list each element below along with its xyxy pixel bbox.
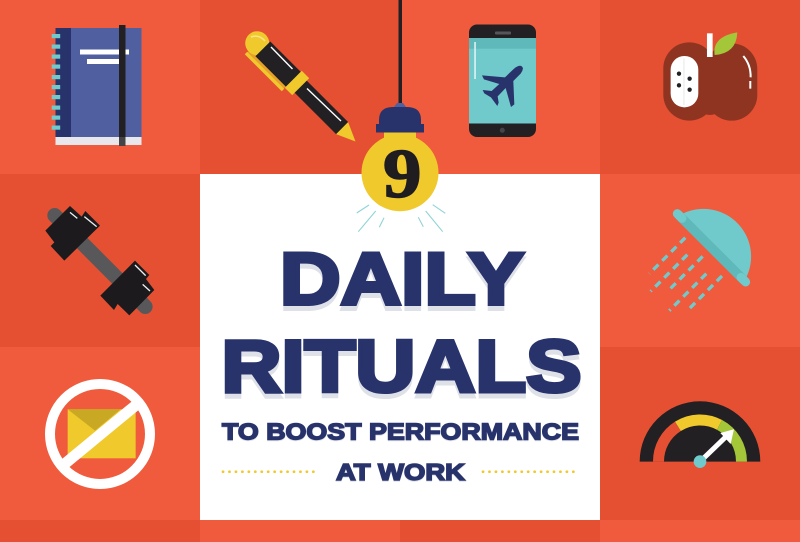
number 9: 9	[383, 136, 422, 213]
icon: apple with bite	[663, 32, 757, 121]
heading: DAILY: DAILY	[280, 239, 524, 320]
icon: fountain pen	[240, 26, 364, 150]
icon: light bulb with number 9	[362, 103, 438, 213]
icon: spiral notebook	[52, 25, 142, 146]
dotted rule: left	[223, 470, 318, 473]
icon: dumbbell	[45, 206, 154, 315]
dotted rule: right	[483, 470, 578, 473]
icon: performance gauge	[640, 401, 760, 468]
icon: shower head	[649, 209, 751, 311]
icon: light rays	[357, 205, 445, 232]
panel: white title card	[200, 174, 600, 520]
subheading: to boost performance: TO BOOST PERFORMANCE	[222, 418, 579, 444]
subheading: at work: AT WORK	[336, 459, 466, 485]
shower water drops	[649, 238, 722, 311]
icon: smartphone with airplane	[469, 24, 536, 137]
icon: crossed-out envelope	[50, 384, 150, 484]
heading: RITUALS: RITUALS	[222, 326, 582, 407]
hanging lamp cord	[398, 0, 402, 104]
